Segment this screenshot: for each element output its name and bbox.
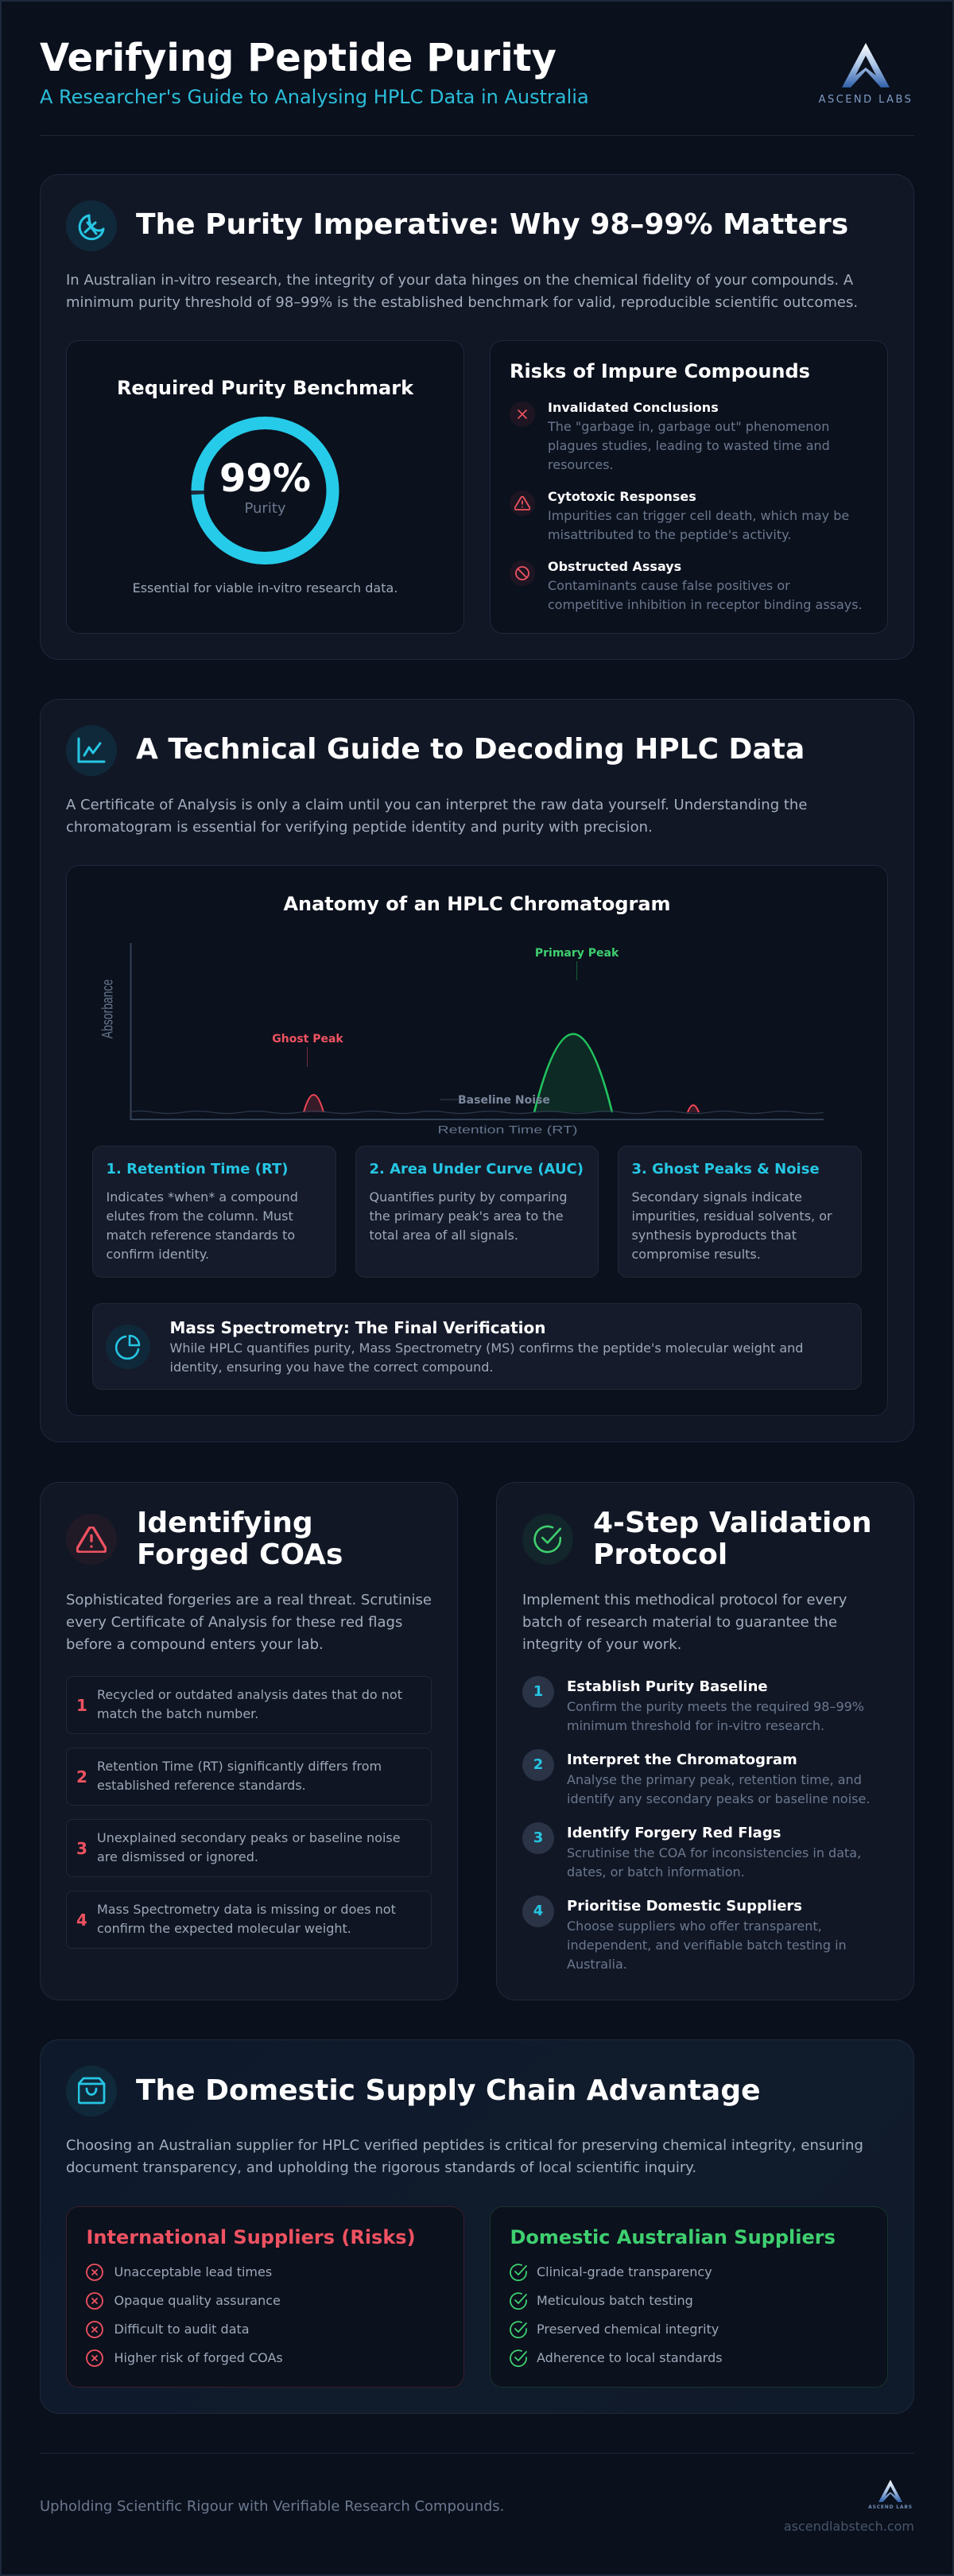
- red flag 4: 4: [76, 1910, 87, 1929]
- panel: domestic suppliers: Domestic Australian Suppliers: [510, 2226, 836, 2248]
- chart: chromatogram: Absorbance: [99, 980, 116, 1038]
- card: retention time: Indicates *when* a compound: [107, 1189, 298, 1205]
- step 1: minimum threshold for in-vitro research.: [567, 1718, 824, 1733]
- benefit item 1: Clinical-grade transparency: [537, 2264, 712, 2279]
- chart: chromatogram: Primary Peak: [535, 947, 619, 960]
- intro text: A Certificate of Analysis is only a claim until you can interpret the raw data yourself. Understanding the: [66, 797, 807, 813]
- risk: cytotoxic responses: Impurities can trigger cell death, which may be: [548, 508, 849, 523]
- panel: chromatogram anatomy: [66, 865, 888, 1416]
- intro text: batch of research material to guarantee the: [522, 1614, 837, 1631]
- red flag 1: Recycled or outdated analysis dates that do not: [97, 1687, 402, 1702]
- footer url: ascendlabstech.com: [784, 2519, 914, 2534]
- step 4: Australia.: [567, 1957, 627, 1972]
- risk: cytotoxic responses: misattributed to the peptide's activity.: [548, 527, 791, 542]
- card: retention time: elutes from the column. Must: [107, 1208, 293, 1224]
- risk: invalidated conclusions: The "garbage in, garbage out" phenomenon: [548, 419, 829, 434]
- footer tagline: Upholding Scientific Rigour with Verifiable Research Compounds.: [40, 2498, 504, 2515]
- card: ghost peaks and noise: impurities, residual solvents, or: [631, 1208, 832, 1224]
- red flag 1: [66, 1676, 432, 1734]
- step 1: [522, 1676, 864, 1733]
- heading: [593, 1507, 872, 1571]
- intro text: every Certificate of Analysis for these red flags: [66, 1614, 402, 1631]
- card: area under curve: 2. Area Under Curve (AUC): [369, 1161, 584, 1177]
- intro text: Implement this methodical protocol for every: [522, 1592, 847, 1608]
- icon: check circle: [522, 1514, 573, 1565]
- intro text: In Australian in-vitro research, the integrity of your data hinges on the chemical fidelity of your compounds. A: [66, 272, 853, 289]
- step 3: 3: [533, 1829, 543, 1846]
- intro text: Choosing an Australian supplier for HPLC verified peptides is critical for preserving chemical integrity, ensuring: [66, 2137, 863, 2154]
- step 4: Choose suppliers who offer transparent,: [567, 1918, 822, 1934]
- heading: Identifying: [137, 1507, 313, 1539]
- heading: 4-Step Validation: [593, 1507, 872, 1539]
- intro text: integrity of your work.: [522, 1636, 681, 1653]
- step 4: 4: [533, 1903, 543, 1919]
- risks heading: Risks of Impure Compounds: [510, 360, 810, 382]
- chart: chromatogram: Retention Time (RT): [438, 1123, 577, 1136]
- panel: international suppliers: [66, 2206, 464, 2388]
- risk: obstructed assays: [510, 559, 863, 612]
- subtitle: A Researcher's Guide to Analysing HPLC Data in Australia: [40, 86, 589, 108]
- heading: Forged COAs: [137, 1538, 343, 1571]
- step 3: Identify Forgery Red Flags: [567, 1824, 781, 1841]
- icon: warning: [66, 1514, 117, 1565]
- intro text: minimum purity threshold of 98–99% is the established benchmark for valid, reproducible scientific outcomes.: [66, 294, 858, 311]
- risk item 3: Difficult to audit data: [114, 2322, 250, 2337]
- red flag 1: 1: [76, 1695, 87, 1714]
- chart: chromatogram: Baseline Noise: [458, 1094, 550, 1107]
- intro text: [66, 1592, 432, 1653]
- callout: mass spectrometry: While HPLC quantifies purity, Mass Spectrometry (MS) confirms the peptide's molecular weight and: [170, 1340, 803, 1356]
- step 1: 1: [533, 1683, 543, 1700]
- step 2: 2: [533, 1756, 543, 1773]
- step 2: [522, 1749, 870, 1806]
- ring value: 99%: [219, 456, 311, 501]
- icon: line chart: [66, 725, 117, 776]
- benchmark heading: Required Purity Benchmark: [117, 377, 413, 399]
- risk: invalidated conclusions: resources.: [548, 457, 614, 472]
- icon: purity: [66, 200, 117, 251]
- step 2: identify any secondary peaks or baseline noise.: [567, 1791, 870, 1806]
- benefit item 2: Meticulous batch testing: [537, 2293, 693, 2308]
- card: area under curve: Quantifies purity by comparing: [369, 1189, 568, 1205]
- heading: A Technical Guide to Decoding HPLC Data: [136, 733, 805, 766]
- step 3: dates, or batch information.: [567, 1864, 745, 1880]
- icon: warning: [510, 491, 535, 516]
- risk: invalidated conclusions: plagues studies, leading to wasted time and: [548, 438, 830, 453]
- risk item 1: Unacceptable lead times: [114, 2264, 272, 2279]
- icon: shopping bag: [66, 2066, 117, 2116]
- intro text: document transparency, and upholding the rigorous standards of local scientific inquiry.: [66, 2159, 696, 2176]
- icon: cross: [510, 402, 535, 427]
- risk: obstructed assays: competitive inhibition in receptor binding assays.: [548, 597, 863, 612]
- red flag 3: are dismissed or ignored.: [97, 1849, 258, 1864]
- benefit item 3: Preserved chemical integrity: [537, 2322, 719, 2337]
- header: [40, 36, 913, 108]
- intro text: [66, 2137, 863, 2176]
- panel: international suppliers: International Suppliers (Risks): [86, 2226, 416, 2248]
- red flag 3: Unexplained secondary peaks or baseline noise: [97, 1830, 401, 1845]
- card: ghost peaks and noise: Secondary signals indicate: [631, 1189, 802, 1205]
- intro text: before a compound enters your lab.: [66, 1636, 324, 1653]
- ring chart: 99%: [191, 417, 339, 564]
- panel: identifying forged COAs: [40, 1482, 458, 2000]
- red flag 1: match the batch number.: [97, 1706, 258, 1721]
- logo: Ascend Labs: ASCEND LABS: [819, 94, 913, 106]
- panel: 4-step validation protocol: [496, 1482, 914, 2000]
- risk: invalidated conclusions: Invalidated Conclusions: [548, 400, 719, 415]
- card: area under curve: total area of all signals.: [369, 1228, 518, 1243]
- step 4: [522, 1895, 847, 1972]
- card: area under curve: [355, 1146, 599, 1278]
- red flag 2: established reference standards.: [97, 1778, 306, 1793]
- red flag 2: 2: [76, 1767, 87, 1786]
- callout: mass spectrometry: [92, 1303, 862, 1390]
- chart: chromatogram: Ghost Peak: [272, 1033, 343, 1046]
- red flag 3: 3: [76, 1838, 87, 1857]
- risk: invalidated conclusions: [510, 400, 830, 472]
- red flag 4: Mass Spectrometry data is missing or does not: [97, 1902, 396, 1917]
- card: ghost peaks and noise: compromise results.: [631, 1247, 761, 1262]
- intro text: [522, 1592, 847, 1653]
- intro text: chromatogram is essential for verifying peptide identity and purity with precision.: [66, 819, 653, 836]
- red flag 4: [66, 1891, 432, 1949]
- step 4: Prioritise Domestic Suppliers: [567, 1897, 802, 1915]
- step 3: [522, 1822, 861, 1880]
- step 2: Interpret the Chromatogram: [567, 1751, 797, 1768]
- card: retention time: 1. Retention Time (RT): [107, 1161, 289, 1177]
- intro text: Sophisticated forgeries are a real threat. Scrutinise: [66, 1592, 432, 1608]
- step 3: Scrutinise the COA for inconsistencies in data,: [567, 1845, 861, 1860]
- card: retention time: [92, 1146, 336, 1278]
- footer logo: ASCEND LABS: [868, 2504, 913, 2510]
- step 1: Confirm the purity meets the required 98–99%: [567, 1699, 864, 1714]
- heading: The Domestic Supply Chain Advantage: [136, 2074, 761, 2107]
- logo: Ascend Labs: [819, 43, 913, 106]
- panel: risks of impure compounds: [490, 340, 888, 634]
- red flag 4: confirm the expected molecular weight.: [97, 1921, 351, 1936]
- benefit item 4: Adherence to local standards: [537, 2350, 723, 2365]
- callout: mass spectrometry: identity, ensuring you have the correct compound.: [170, 1360, 494, 1375]
- intro text: [66, 272, 858, 311]
- step 2: Analyse the primary peak, retention time, and: [567, 1772, 862, 1787]
- ring label: Purity: [244, 500, 286, 517]
- card: retention time: match reference standards to: [107, 1228, 295, 1243]
- risk item 4: Higher risk of forged COAs: [114, 2350, 283, 2365]
- card: ghost peaks and noise: [618, 1146, 862, 1278]
- step 1: Establish Purity Baseline: [567, 1678, 768, 1695]
- heading: The Purity Imperative: Why 98–99% Matters: [136, 208, 848, 241]
- heading: Protocol: [593, 1538, 727, 1571]
- risk: obstructed assays: Contaminants cause false positives or: [548, 578, 790, 593]
- risk: cytotoxic responses: [510, 489, 849, 542]
- callout: mass spectrometry: Mass Spectrometry: The Final Verification: [170, 1318, 546, 1337]
- card: retention time: confirm identity.: [107, 1247, 209, 1262]
- risk: cytotoxic responses: Cytotoxic Responses: [548, 489, 696, 504]
- title: Verifying Peptide Purity: [40, 36, 556, 80]
- card: area under curve: the primary peak's area to the: [369, 1208, 564, 1224]
- risk: obstructed assays: Obstructed Assays: [548, 559, 681, 574]
- red flag 3: [66, 1819, 432, 1877]
- footer: [40, 2480, 914, 2534]
- icon: pie chart: [106, 1325, 150, 1369]
- icon: blocked: [510, 561, 535, 586]
- panel: domestic supply chain advantage: [40, 2039, 914, 2414]
- panel: required purity benchmark: [66, 340, 464, 634]
- chromatogram heading: Anatomy of an HPLC Chromatogram: [283, 893, 671, 915]
- panel: decoding HPLC data: [40, 699, 914, 1442]
- intro text: [66, 797, 807, 836]
- panel: domestic suppliers: [490, 2206, 888, 2388]
- card: ghost peaks and noise: 3. Ghost Peaks & Noise: [631, 1161, 820, 1177]
- footer logo: [868, 2480, 913, 2510]
- red flag 2: [66, 1748, 432, 1806]
- heading: [137, 1507, 343, 1571]
- caption: Essential for viable in-vitro research data.: [133, 580, 398, 596]
- step 4: independent, and verifiable batch testing in: [567, 1938, 847, 1953]
- red flag 2: Retention Time (RT) significantly differs from: [97, 1759, 382, 1774]
- card: ghost peaks and noise: synthesis byproducts that: [631, 1228, 797, 1243]
- risk item 2: Opaque quality assurance: [114, 2293, 281, 2308]
- panel: purity imperative: [40, 174, 914, 660]
- chart: chromatogram: [99, 943, 824, 1136]
